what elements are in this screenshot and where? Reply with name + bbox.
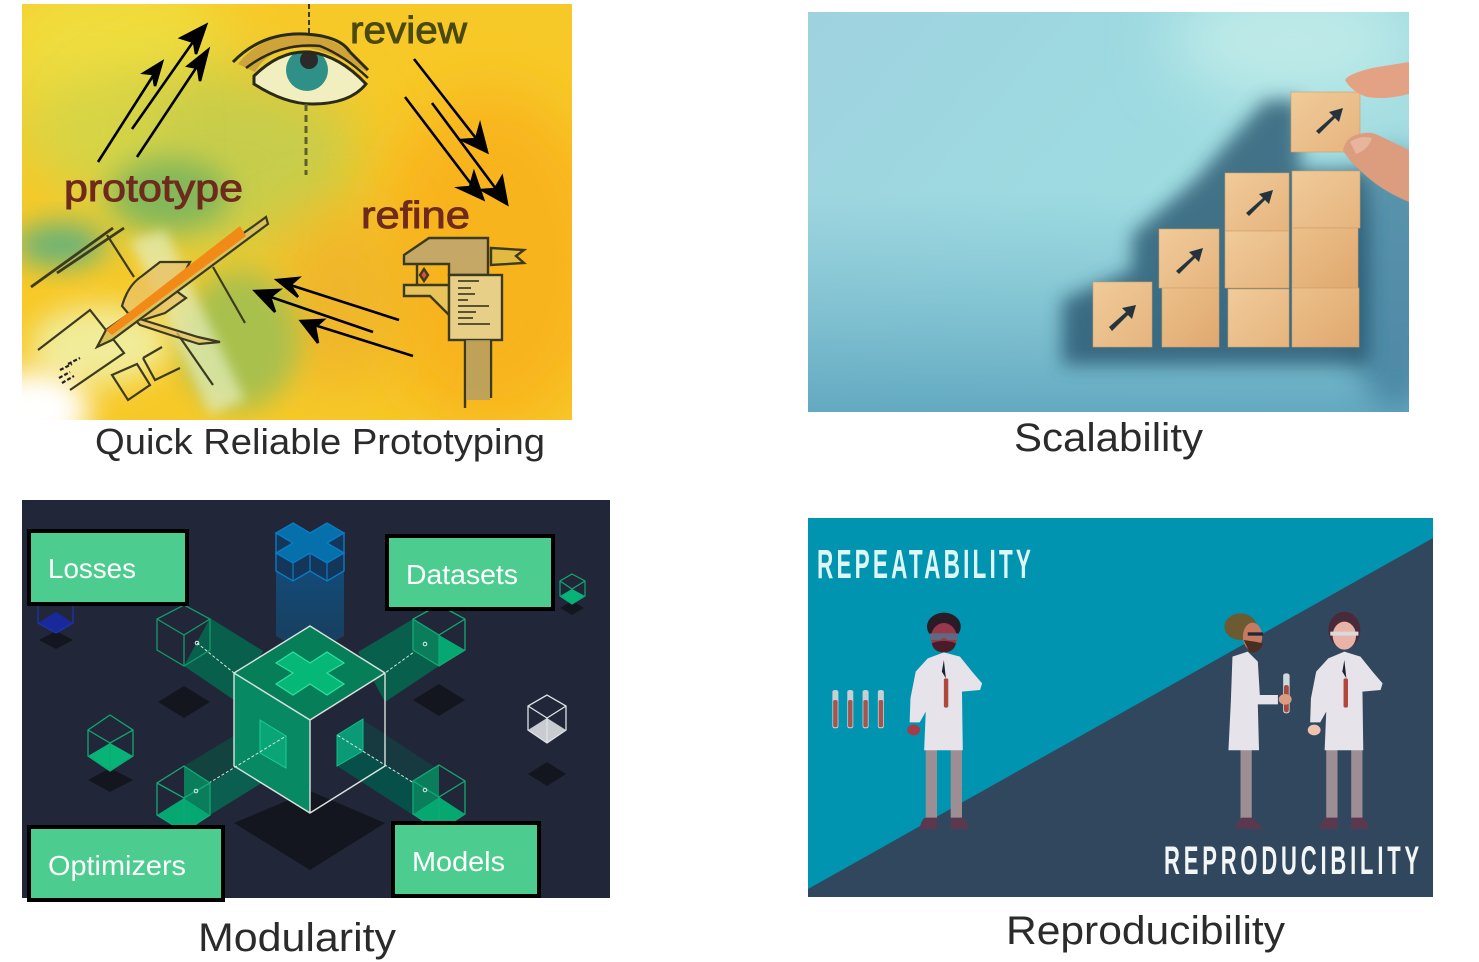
dashed connectors	[196, 643, 425, 791]
panel: scalability	[808, 0, 1445, 460]
floating white cube	[528, 695, 566, 743]
floating green cube	[88, 715, 133, 771]
wire cube: back right	[413, 605, 465, 666]
caption: Quick Reliable Prototyping	[95, 421, 545, 462]
floating blue cube	[37, 606, 74, 634]
wire cube: back left	[157, 605, 210, 666]
icons: arrows on blocks	[1109, 108, 1343, 331]
heading: reproducibility: REPRODUCIBILITY	[1164, 838, 1419, 883]
label: Datasets: Datasets	[406, 559, 518, 590]
icon: scientist middle	[1224, 613, 1292, 829]
caption: Modularity	[198, 916, 396, 960]
block shadows	[1062, 100, 1370, 365]
icon: eye	[233, 4, 368, 175]
icon: test tubes	[832, 690, 884, 728]
floor shadows	[39, 601, 584, 870]
label: Losses	[29, 531, 187, 604]
icon: scientist left	[907, 613, 982, 829]
icon: fingers	[1343, 62, 1409, 202]
label: Optimizers	[29, 827, 223, 900]
label: Models: Models	[412, 846, 505, 877]
heading: repeatability: REPEATABILITY	[817, 542, 1031, 588]
beams behind cube	[184, 618, 439, 815]
heading: refine: refine	[361, 195, 470, 237]
label: Losses: Losses	[48, 553, 136, 584]
arrows: review to refine	[405, 59, 507, 204]
caption: Reproducibility	[1006, 909, 1285, 953]
panel: modularity	[22, 500, 610, 960]
heading: review: review	[350, 10, 468, 52]
floating small green cube	[560, 574, 585, 604]
label: Optimizers: Optimizers	[48, 850, 186, 881]
arrows: refine to prototype	[255, 278, 413, 356]
blue cross column	[276, 523, 344, 655]
diagonal dark area	[808, 538, 1433, 897]
wire cube: front right	[412, 764, 466, 821]
central cube	[234, 626, 385, 813]
heading: prototype: prototype	[64, 168, 243, 210]
panel: quick reliable prototyping	[22, 4, 572, 462]
icon: scientist right	[1308, 612, 1383, 829]
blocks stack	[1093, 92, 1360, 347]
icon: caliper	[404, 238, 524, 408]
caption: Scalability	[1014, 416, 1203, 460]
wire cube: front left	[157, 766, 210, 832]
background wall	[808, 0, 1445, 412]
label: Datasets	[387, 536, 553, 609]
label: Models	[393, 823, 539, 896]
watercolor background	[22, 4, 572, 420]
arrows: prototype to review	[98, 25, 208, 162]
panel: reproducibility	[808, 518, 1433, 953]
icon: hand with pencil and sketches	[31, 217, 268, 400]
